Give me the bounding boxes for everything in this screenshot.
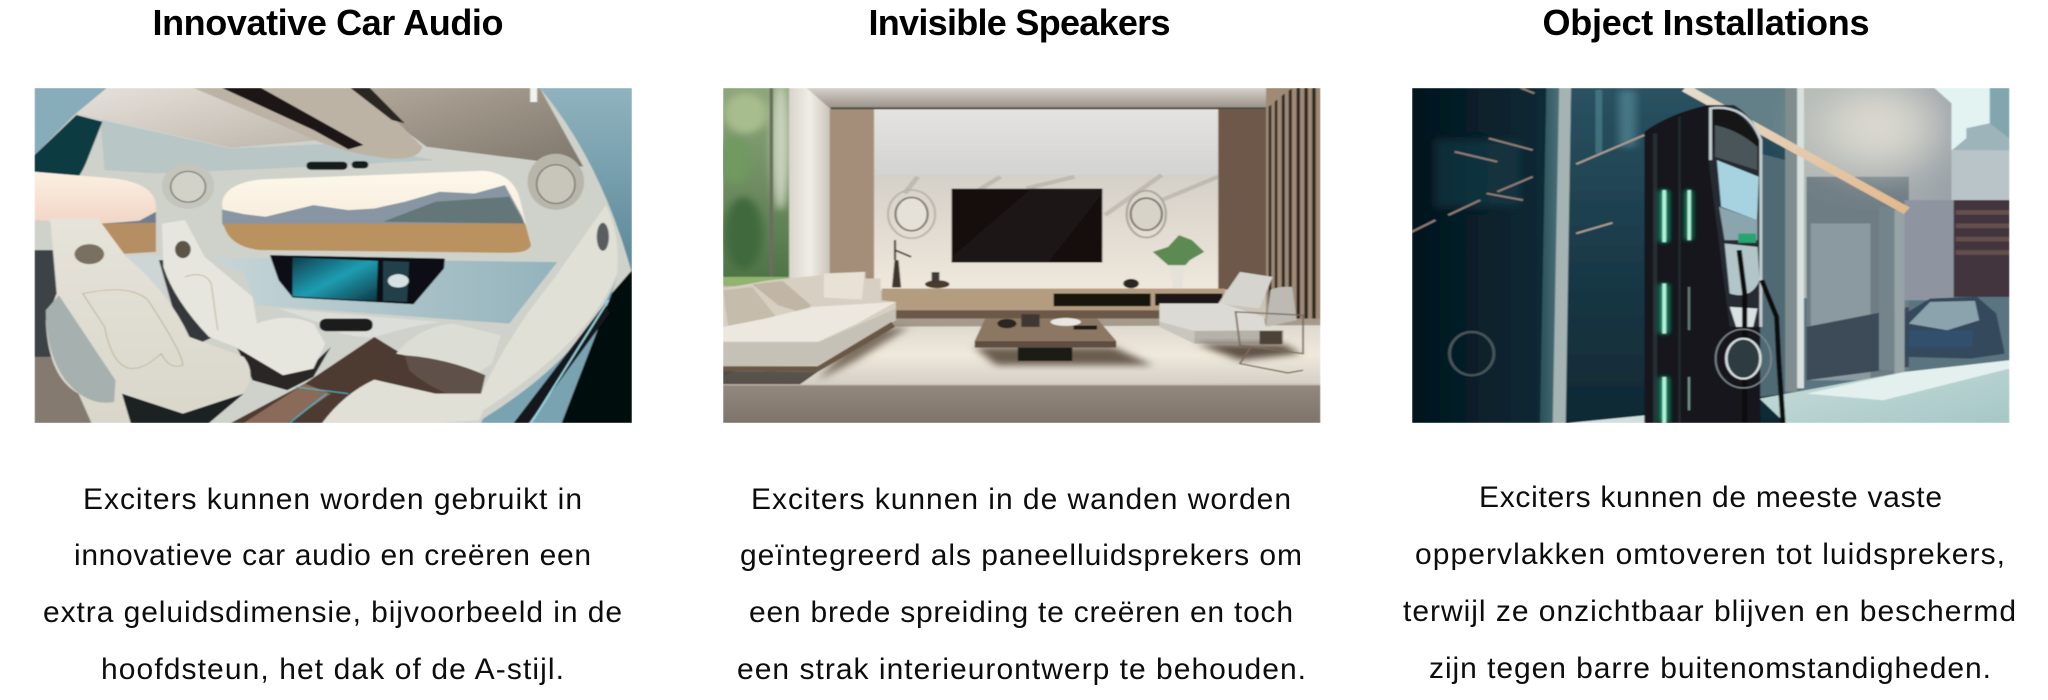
- text block: Object Installations description: Exciters kunnen de meeste vaste: [1479, 481, 1942, 514]
- text block: Object Installations description: terwijl ze onzichtbaar blijven en beschermd: [1403, 595, 2016, 628]
- heading: Object Installations: Object Installations: [1542, 2, 1870, 43]
- dashboard: [270, 255, 445, 304]
- left sofa: [723, 272, 896, 367]
- TV: [952, 189, 1102, 263]
- speakers: [162, 163, 214, 209]
- left upper teal: [34, 88, 107, 155]
- lower wall: [213, 258, 557, 324]
- photo: EV charging station with exciter: [1412, 88, 2010, 423]
- curtain: [789, 88, 831, 278]
- green light strips: [1659, 190, 1692, 423]
- forest window: [723, 88, 789, 278]
- text block: Invisible Speakers description: [737, 483, 1306, 686]
- media console: [882, 289, 1225, 310]
- text block: Invisible Speakers description: geïntegreerd als paneelluidsprekers om: [740, 539, 1302, 572]
- slats: [1266, 88, 1320, 342]
- text block: Innovative Car Audio description: Exciters kunnen worden gebruikt in: [83, 483, 582, 516]
- text block: Innovative Car Audio description: hoofdsteun, het dak of de A-stijl.: [101, 653, 564, 686]
- pavement: [1760, 360, 2010, 423]
- main window: [222, 171, 531, 253]
- text block: Invisible Speakers description: een strak interieurontwerp te behouden.: [737, 653, 1306, 686]
- ceiling: [807, 88, 1320, 109]
- left dark glass: [1412, 88, 1546, 423]
- text block: Innovative Car Audio description: [43, 483, 622, 686]
- second seat: [162, 220, 325, 375]
- right glass & building: [1802, 88, 1951, 298]
- overhead console: [194, 88, 422, 159]
- text block: Invisible Speakers description: Exciters kunnen in de wanden worden: [751, 483, 1291, 516]
- heading: Invisible Speakers: Invisible Speakers: [868, 2, 1170, 43]
- floor: [231, 337, 483, 423]
- heading: Innovative Car Audio: Innovative Car Audio: [152, 2, 504, 43]
- left edge and gap between seats: [34, 250, 61, 360]
- wood panels: [830, 109, 874, 290]
- parked car: [1905, 297, 2005, 359]
- middle glass: [1566, 88, 1785, 423]
- right front seat: [322, 205, 618, 423]
- skylight: [76, 88, 320, 148]
- exciter rings: [1716, 329, 1771, 388]
- photo: futuristic car interior: [34, 88, 632, 423]
- text block: Object Installations description: [1403, 481, 2016, 685]
- photo: living room with invisible wall speakers: [723, 88, 1320, 423]
- decor: [892, 260, 901, 288]
- screen: [1717, 160, 1759, 220]
- centre console: [279, 309, 440, 338]
- right blue wall: [540, 88, 632, 274]
- left seat: [46, 218, 250, 423]
- vents: [306, 162, 347, 170]
- wall: [874, 109, 1218, 175]
- wall speakers: [888, 190, 935, 238]
- middle-right seat: [396, 324, 501, 375]
- text block: Object Installations description: zijn tegen barre buitenomstandigheden.: [1429, 652, 1991, 685]
- sky & right buildings: [1934, 88, 1990, 151]
- text block: Innovative Car Audio description: extra geluidsdimensie, bijvoorbeeld in de: [43, 596, 622, 629]
- vertical frame: [1785, 88, 1797, 392]
- text block: Object Installations description: oppervlakken omtoveren tot luidsprekers,: [1415, 538, 2005, 571]
- beam: [1685, 88, 1907, 211]
- coffee table: [975, 319, 1116, 341]
- charger body: [1644, 105, 1760, 423]
- floor, rug: [723, 319, 1320, 329]
- left window: [34, 172, 156, 253]
- text block: Invisible Speakers description: een brede spreiding te creëren en toch: [749, 596, 1293, 629]
- frame: [1540, 88, 1559, 423]
- right chaise: [1218, 272, 1273, 309]
- seat base: [235, 344, 331, 390]
- cradle: [1725, 243, 1760, 295]
- ceiling: [348, 88, 583, 167]
- text block: Innovative Car Audio description: innovatieve car audio en creëren een: [74, 539, 591, 572]
- side table: [1236, 312, 1303, 373]
